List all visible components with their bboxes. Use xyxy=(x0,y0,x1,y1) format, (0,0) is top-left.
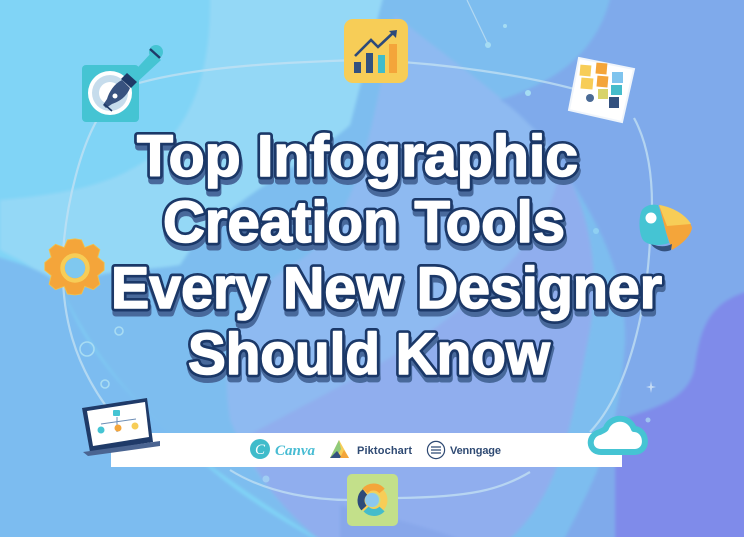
title shadow xyxy=(112,129,663,392)
title shadow: Creation Tools xyxy=(164,195,566,260)
logo: Piktochart xyxy=(330,440,412,458)
title shadow: Top Infographic xyxy=(138,129,579,194)
title outline: Every New Designer xyxy=(111,256,662,321)
title text: Top Infographic xyxy=(137,124,578,189)
title outline xyxy=(111,124,662,387)
logo: Venngage xyxy=(427,441,501,459)
logo strip xyxy=(111,433,622,467)
icon: fountain pen xyxy=(82,45,163,122)
title outline: Should Know xyxy=(188,322,551,387)
icon: laptop with flowchart xyxy=(82,398,160,456)
title text: Creation Tools xyxy=(163,190,565,255)
rounded connecting outline xyxy=(63,0,652,500)
logo: Venngage: Venngage xyxy=(450,445,501,457)
decorative dots xyxy=(80,24,656,482)
icon: colour palette xyxy=(640,205,692,251)
title text xyxy=(111,124,662,387)
icon: colour swatches xyxy=(569,58,634,122)
logo: Piktochart: Piktochart xyxy=(357,445,412,457)
logo: Canva: C xyxy=(255,442,266,458)
logo: Canva xyxy=(250,439,316,459)
title shadow: Every New Designer xyxy=(112,261,663,326)
title outline: Creation Tools xyxy=(163,190,565,255)
title xyxy=(111,124,663,392)
title shadow: Should Know xyxy=(189,327,552,392)
title text: Should Know xyxy=(188,322,551,387)
title text: Every New Designer xyxy=(111,256,662,321)
logo: Canva: Canva xyxy=(275,443,316,459)
title outline: Top Infographic xyxy=(137,124,578,189)
icon: settings gear xyxy=(45,239,104,295)
icon: green tile with ring xyxy=(347,474,398,526)
icon: growth chart xyxy=(344,19,408,83)
icon: cloud xyxy=(591,419,645,452)
